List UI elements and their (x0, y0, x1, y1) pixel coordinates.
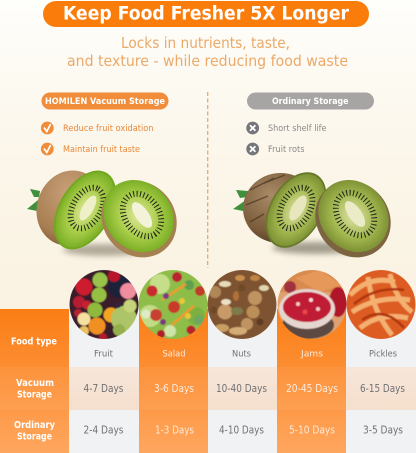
image: pickles (346, 270, 416, 340)
panel: vacuum storage (41, 92, 169, 155)
subtitle: and texture - while reducing food waste (67, 52, 348, 70)
aged kiwi illustration (233, 161, 406, 273)
subtitle (67, 34, 348, 70)
food labels: Jams (300, 349, 323, 359)
food labels: Nuts (232, 349, 251, 359)
drawback: fruit rots: Fruit rots (268, 145, 305, 155)
title: Keep Food Fresher 5X Longer (63, 4, 350, 24)
row headings: Vacuum (16, 378, 54, 389)
row headings: Storage (17, 432, 52, 442)
image: nuts (207, 270, 277, 340)
fresh kiwi illustration (27, 160, 192, 273)
vacuum storage heading: HOMILEN Vacuum Storage (45, 96, 165, 107)
row headings: Storage (17, 390, 52, 400)
food labels: Salad (162, 349, 186, 359)
row headings: Ordinary (14, 420, 56, 431)
row headings (11, 336, 57, 442)
vacuum storage days: 6-15 Days (360, 383, 405, 395)
ordinary storage days: 2-4 Days (84, 424, 124, 436)
ordinary storage days: 3-5 Days (363, 424, 403, 436)
ordinary storage days: 5-10 Days (289, 424, 335, 436)
food labels: Fruit (94, 349, 113, 359)
ordinary storage days: 4-10 Days (219, 424, 264, 436)
image: fruit (69, 270, 139, 341)
table: storage comparison (0, 270, 416, 453)
image: jams (277, 270, 347, 340)
table columns (0, 309, 416, 453)
subtitle: Locks in nutrients, taste, (121, 34, 290, 52)
panel: ordinary storage (246, 92, 374, 155)
vacuum storage days: 10-40 Days (216, 383, 267, 395)
benefit: reduce fruit oxidation: Reduce fruit oxidation (63, 124, 154, 134)
vacuum storage days: 4-7 Days (84, 383, 124, 395)
vacuum storage days: 20-45 Days (286, 383, 338, 395)
benefit: maintain fruit taste: Maintain fruit taste (63, 145, 140, 155)
food labels: Pickles (369, 349, 397, 359)
vacuum storage days: 3-6 Days (154, 383, 194, 395)
row headings: Food type (11, 336, 57, 347)
divider (207, 92, 209, 268)
vacuum storage days (84, 383, 405, 395)
image: salad (138, 270, 208, 340)
drawback: short shelf life: Short shelf life (268, 124, 326, 134)
ordinary storage days: 1-3 Days (155, 424, 194, 436)
ordinary storage days (84, 424, 403, 436)
ordinary storage heading: Ordinary Storage (272, 96, 348, 107)
food labels (94, 349, 397, 359)
